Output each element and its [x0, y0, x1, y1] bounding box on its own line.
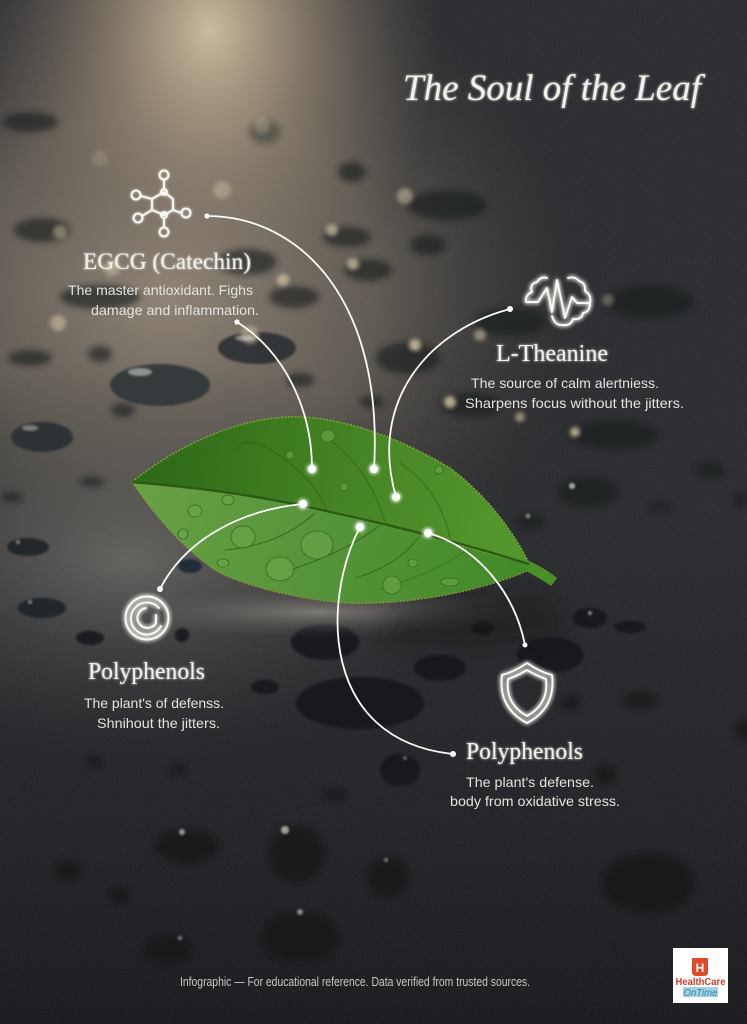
panel: L-Theanine	[465, 277, 684, 411]
logo: HealthCare OnTime	[673, 948, 728, 1003]
leaf blade: lower half	[132, 482, 529, 603]
text: right Polyphenols description: body from oxidative stress.	[450, 793, 620, 809]
text: ECGG description	[68, 282, 259, 318]
glowing connector nodes	[157, 213, 528, 757]
text: L-Theanine description	[465, 375, 684, 411]
text: right Polyphenols description: The plant's defense.	[466, 774, 594, 790]
tea leaf	[132, 417, 557, 603]
connector: ECGG icon	[207, 216, 375, 469]
panel: left Polyphenols	[84, 596, 224, 731]
leaf blade: upper half	[132, 417, 529, 563]
dew drops on leaf	[178, 430, 459, 594]
text: left Polyphenols description	[84, 695, 224, 731]
connector: left Polyphenols	[160, 504, 303, 589]
icon: concentric circles	[126, 596, 168, 640]
connector: L-Theanine	[389, 309, 510, 497]
panel: right Polyphenols	[450, 663, 620, 809]
connector: ECGG detail	[237, 322, 312, 469]
text: L-Theanine description: Sharpens focus without the jitters.	[465, 395, 684, 411]
logo: HealthCare OnTime: HealthCare	[676, 977, 726, 988]
icon: shield	[502, 663, 552, 723]
connector lines from leaf to labels	[160, 216, 525, 754]
icon: molecule	[132, 170, 190, 236]
heading: L-Theanine: L-Theanine	[496, 341, 608, 367]
connector: shield	[428, 533, 525, 645]
logo: HealthCare OnTime: H	[696, 961, 704, 975]
title: The Soul of the Leaf	[403, 68, 706, 109]
panel: ECGG	[68, 170, 259, 318]
leaf stem	[526, 560, 557, 586]
text: left Polyphenols description: Shnihout the jitters.	[97, 715, 220, 731]
heading: ECGG: EGCG (Catechin)	[83, 249, 251, 274]
icon: brain with pulse	[526, 277, 590, 325]
text: L-Theanine description: The source of calm alertniess.	[471, 375, 659, 391]
footer note: Infographic — For educational reference. Data verified from trusted sources.	[180, 975, 530, 989]
logo: HealthCare OnTime: OnTime	[684, 988, 718, 999]
text: ECGG description: damage and inflammation.	[91, 302, 259, 318]
text: ECGG description: The master antioxidant. Fighs	[68, 282, 253, 298]
leaf shadow and lit ground	[110, 586, 570, 648]
connector: right Polyphenols text	[338, 527, 453, 754]
leaf midrib and veins	[132, 440, 529, 590]
text: right Polyphenols description	[450, 774, 620, 809]
heading: left Polyphenols: Polyphenols	[88, 659, 205, 685]
heading: right Polyphenols: Polyphenols	[466, 739, 583, 765]
text: left Polyphenols description: The plant's of defenss.	[84, 695, 224, 711]
